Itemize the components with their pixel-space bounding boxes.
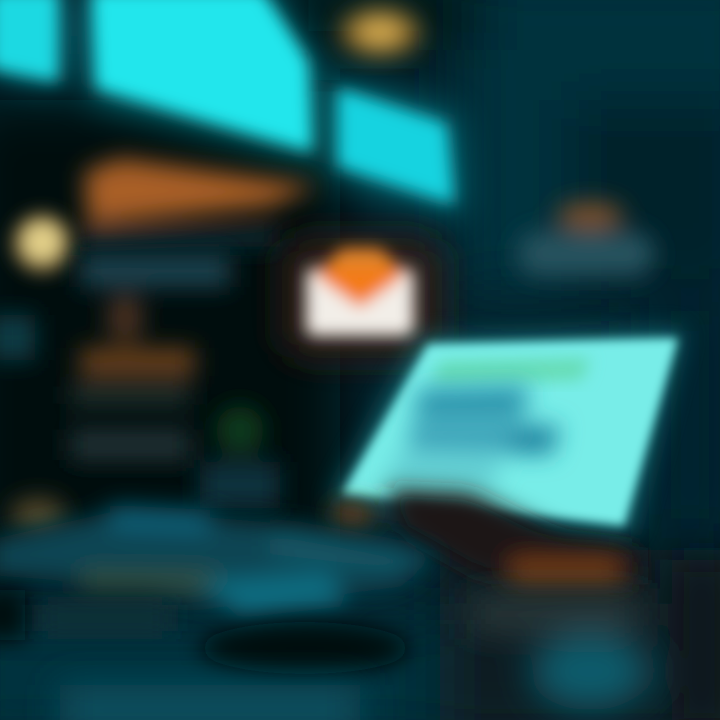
laptop base and hand <box>330 488 640 586</box>
screen: green header line <box>432 358 590 384</box>
laptop screen <box>330 330 684 536</box>
orange shelf band <box>80 158 318 248</box>
desk reflection <box>60 560 720 720</box>
envelope icon <box>282 238 442 358</box>
wall lamp: pale yellow <box>10 211 74 275</box>
cloud icon: right wall <box>518 202 654 276</box>
ceiling panels: cyan lights <box>0 0 462 215</box>
ceiling lamp: amber <box>340 8 420 56</box>
keyboard and desk <box>0 505 440 674</box>
shelf objects: left cluster <box>0 255 280 532</box>
screen: dark content block <box>388 385 560 482</box>
